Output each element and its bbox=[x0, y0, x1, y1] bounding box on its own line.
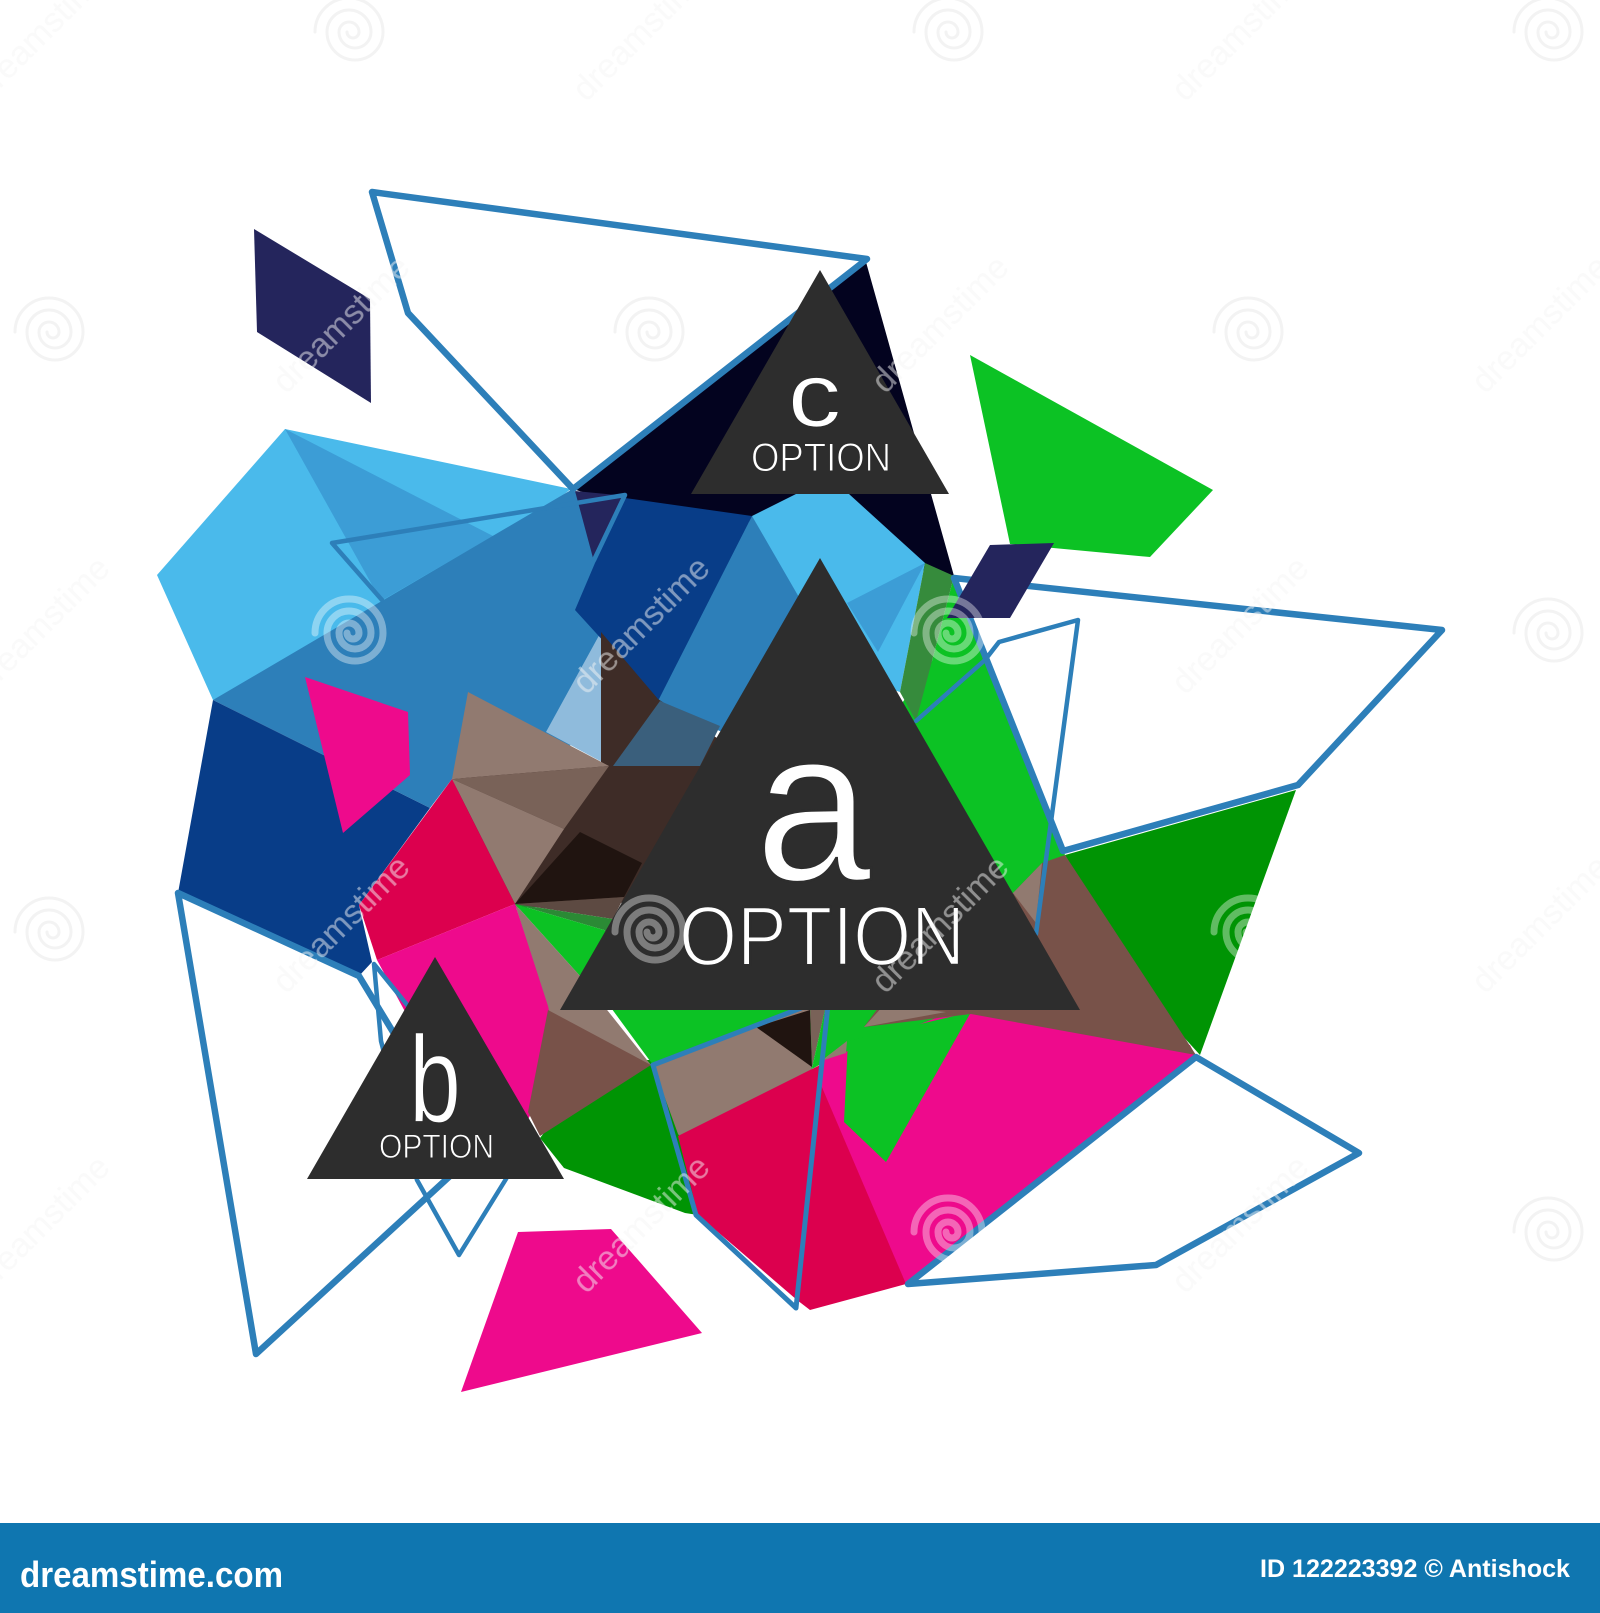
red and pink polygons, left bbox=[305, 677, 826, 1215]
watermark text: dreamstime bbox=[864, 848, 1016, 1000]
pink shard bottom bbox=[461, 1229, 702, 1392]
watermark spirals on white bbox=[15, 0, 1582, 1260]
watermark text: dreamstime bbox=[1164, 549, 1316, 701]
footer logo text: dreamstime.com bbox=[20, 1554, 283, 1595]
triangle: option a: OPTION bbox=[679, 889, 965, 983]
blue polygon cluster bbox=[157, 429, 925, 976]
triangle: option a: a bbox=[755, 684, 871, 926]
watermark text: dreamstime bbox=[864, 248, 1016, 400]
footer image id: ID 122223392 © Antishock bbox=[1260, 1555, 1570, 1583]
green and brown polygons, lower centre bbox=[653, 1005, 1196, 1310]
navy shard top left bbox=[254, 229, 371, 403]
triangle: option b: b bbox=[409, 1012, 461, 1149]
triangle: option b bbox=[307, 957, 564, 1179]
blue outline shapes bbox=[178, 192, 1442, 1354]
watermark text: dreamstime bbox=[265, 848, 417, 1000]
triangle: option b: OPTION bbox=[379, 1128, 494, 1166]
watermark text: dreamstime bbox=[1164, 1148, 1316, 1300]
watermark text: dreamstime bbox=[565, 549, 717, 701]
watermark text: dreamstime bbox=[265, 248, 417, 400]
triangle: option c bbox=[691, 270, 949, 494]
triangle: option a bbox=[560, 558, 1080, 1010]
triangle: option c: OPTION bbox=[751, 436, 891, 480]
brown polygon cluster bbox=[452, 632, 720, 919]
green shard top right bbox=[970, 355, 1213, 557]
footer bar bbox=[0, 1523, 1600, 1613]
green and brown polygons, right bbox=[864, 563, 1296, 1055]
navy shard centre right bbox=[947, 543, 1054, 618]
dark navy shard behind option c bbox=[576, 262, 954, 576]
watermark spirals on colour bbox=[315, 599, 1282, 1260]
triangle: option c: c bbox=[788, 346, 841, 446]
watermark text: dreamstime bbox=[565, 1148, 717, 1300]
